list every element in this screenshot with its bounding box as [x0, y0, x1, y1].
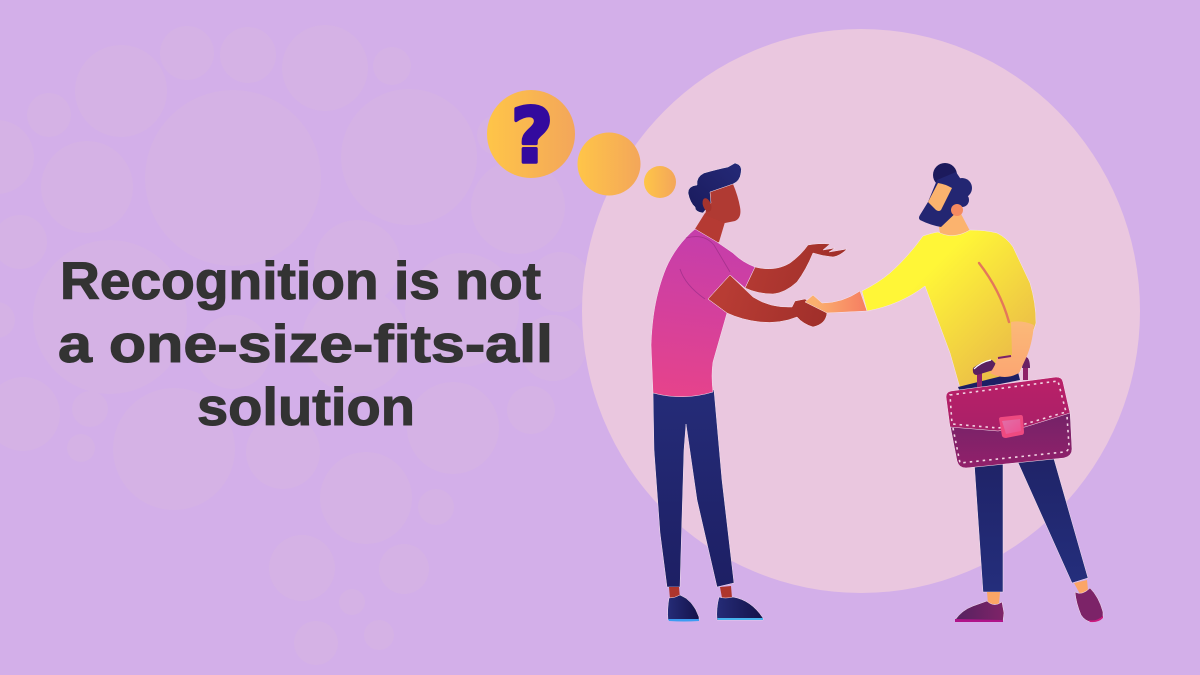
sleeve fold	[979, 263, 1009, 322]
briefcase	[946, 377, 1072, 468]
title: solution	[197, 378, 415, 437]
figure: man in yellow sweater	[805, 163, 1103, 622]
neck	[695, 213, 725, 243]
title	[58, 252, 553, 437]
torso	[651, 229, 755, 397]
forearm holding bag	[990, 321, 1034, 377]
stitching	[950, 381, 1069, 463]
finger line	[998, 356, 1011, 358]
ear	[951, 204, 963, 216]
left shoe	[668, 595, 699, 620]
briefcase handle grip	[973, 360, 1000, 375]
ear	[701, 197, 713, 213]
dark waist	[958, 372, 1020, 392]
case body	[950, 410, 1072, 468]
figure: man in pink shirt	[651, 163, 847, 622]
hand and forearm reaching	[805, 291, 867, 313]
socks	[669, 586, 732, 599]
title: a one-size-fits-all	[58, 315, 553, 374]
hair and beard	[919, 163, 972, 227]
shoe soles	[955, 619, 1003, 622]
shoe soles	[668, 619, 699, 622]
background bubble pattern	[0, 25, 590, 665]
back arm and hand	[745, 244, 847, 294]
clasp	[999, 415, 1024, 438]
face	[928, 183, 952, 211]
handle posts	[977, 358, 1028, 388]
yellow sweater	[862, 230, 1036, 388]
front arm and hand	[708, 275, 827, 327]
pink backdrop circle	[582, 29, 1140, 593]
title: Recognition is not	[60, 252, 541, 311]
right shoe	[717, 597, 763, 620]
right shoe	[1075, 588, 1103, 622]
ankles	[987, 580, 1088, 604]
legs	[974, 460, 1003, 592]
left shoe	[955, 601, 1004, 621]
case flap	[946, 377, 1070, 431]
thought bubbles with question mark	[487, 90, 676, 198]
icon: question mark: ?	[511, 91, 553, 180]
hair	[688, 163, 741, 213]
face	[705, 184, 740, 223]
legs	[653, 390, 734, 587]
neck	[938, 212, 970, 236]
shirt fold lines	[680, 237, 730, 299]
